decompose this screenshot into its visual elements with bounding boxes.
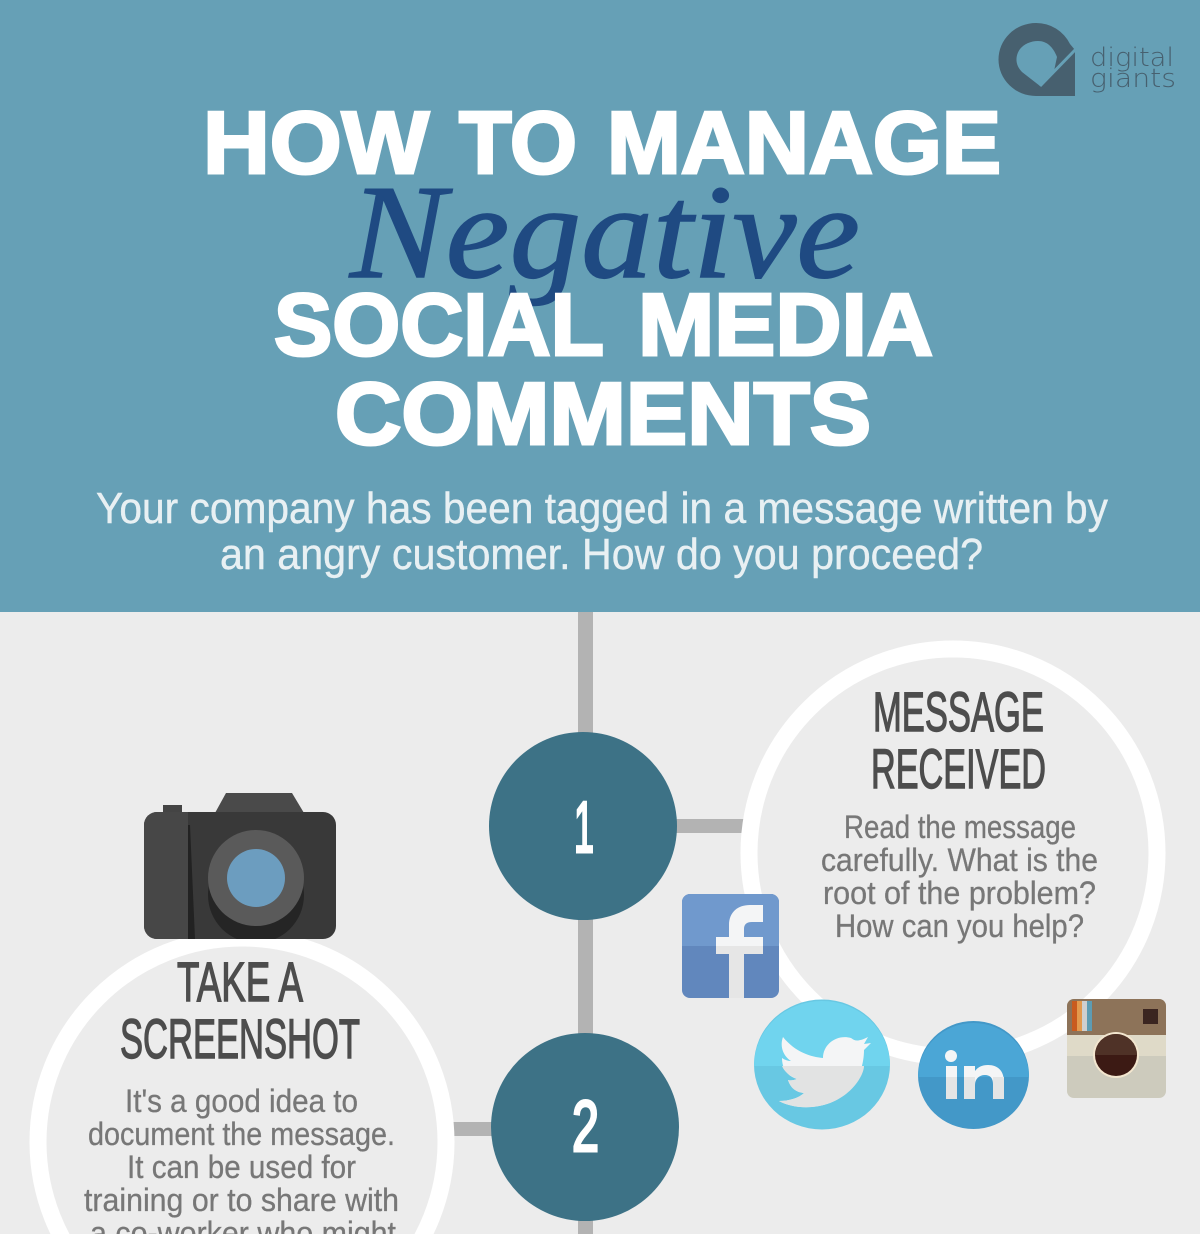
step 1 marker: 1 (574, 788, 594, 868)
body: message received: How can you help? (835, 908, 1084, 944)
step 2 marker (491, 1033, 679, 1221)
icon: twitter (754, 1000, 890, 1130)
logo wordmark: digital (1090, 43, 1174, 73)
panel: message received (749, 649, 1157, 1057)
body: message received: Read the message (844, 809, 1076, 845)
title line: Comments: COMMENTS (335, 364, 871, 463)
body: message received: carefully. What is the (821, 842, 1098, 878)
timeline line (578, 612, 593, 1234)
subtitle: an angry customer. How do you proceed? (220, 530, 983, 579)
connector: step 2 (452, 1122, 497, 1136)
title line: How to manage: MANAGE (607, 93, 1001, 192)
connector: step 1 (670, 819, 748, 833)
title line: How to manage (203, 93, 1001, 192)
title (203, 93, 1001, 463)
title line: How to manage: TO (459, 93, 577, 192)
logo wordmark: giants (1090, 64, 1176, 94)
heading: message received (871, 680, 1046, 800)
heading: take a screenshot: SCREENSHOT (120, 1007, 360, 1070)
title line: Social media: SOCIAL (274, 275, 604, 374)
title word: Negative: Negative (349, 158, 860, 306)
step 1 marker (489, 732, 677, 920)
body: take a screenshot: document the message. (88, 1116, 395, 1152)
subtitle (96, 484, 1108, 579)
icon: facebook (682, 894, 779, 998)
icon: camera (144, 793, 336, 943)
header panel (0, 0, 1200, 612)
body: take a screenshot: training or to share with (84, 1182, 399, 1218)
icon: instagram (1067, 999, 1166, 1098)
body: message received (821, 809, 1098, 944)
panel: take a screenshot (38, 938, 446, 1234)
heading: take a screenshot (120, 950, 360, 1070)
logo mark (998, 23, 1076, 96)
body: take a screenshot: It's a good idea to (125, 1083, 358, 1119)
step 2 marker: 2 (572, 1087, 599, 1167)
heading: take a screenshot: TAKE A (177, 950, 303, 1013)
logo: digital giants (998, 23, 1176, 96)
subtitle: Your company has been tagged in a message written by (96, 484, 1108, 533)
logo wordmark (1090, 43, 1176, 94)
heading: message received: RECEIVED (871, 737, 1046, 800)
title line: Social media: MEDIA (638, 275, 933, 374)
title line: Social media (274, 275, 933, 374)
body: message received: root of the problem? (823, 875, 1096, 911)
body: take a screenshot: It can be used for (127, 1149, 356, 1185)
heading: message received: MESSAGE (873, 680, 1044, 743)
icon: linkedin (918, 1021, 1029, 1129)
title line: How to manage: HOW (203, 93, 429, 192)
body: take a screenshot (84, 1083, 399, 1234)
